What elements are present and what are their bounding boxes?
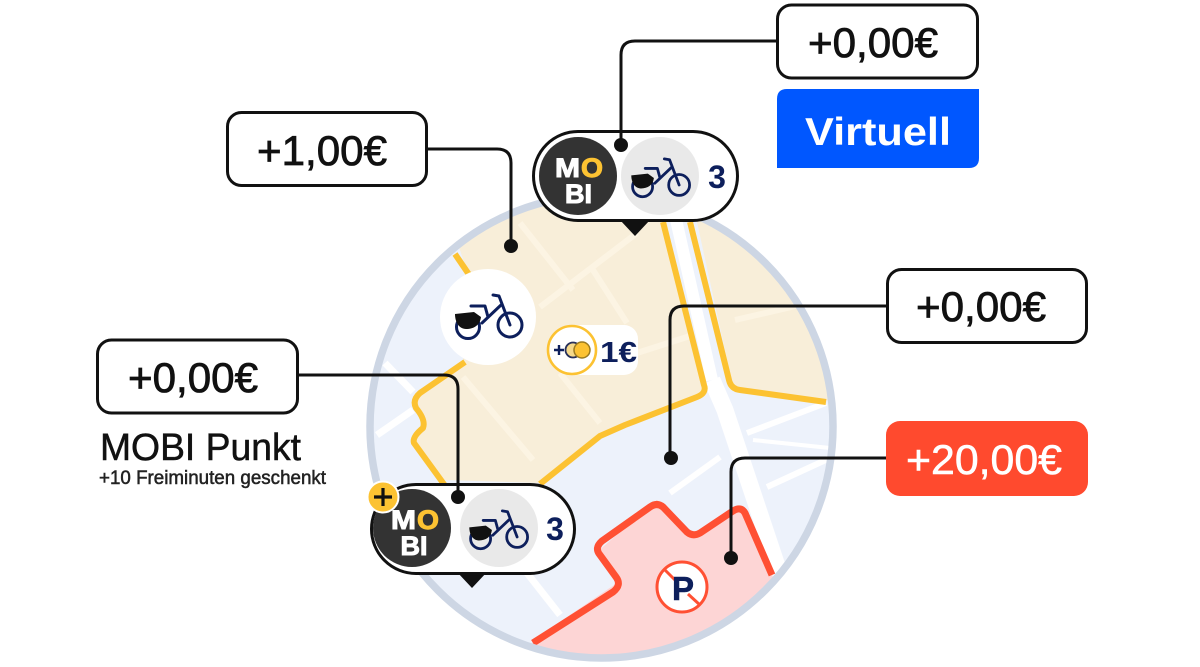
price label: virtual station: +0,00€ [808, 19, 938, 66]
text: MOBI Punkt caption [99, 427, 327, 489]
price label: virtual station [778, 5, 978, 78]
map: white streets [377, 215, 830, 615]
pin: MOBI Punkt station: M [391, 505, 416, 535]
pin: MOBI Punkt station: O [417, 505, 439, 535]
price label: free-floating bike [228, 112, 426, 186]
price label: MOBI Punkt: +0,00€ [128, 354, 258, 401]
icon: plus badge [368, 482, 398, 512]
connector: MOBI Punkt to price [299, 375, 465, 504]
pin: MOBI virtual station [534, 132, 738, 236]
badge: Virtuell [777, 89, 979, 168]
price label: street: +0,00€ [916, 283, 1046, 330]
map: light streets in beige zone [463, 223, 800, 460]
map: yellow boundaries [414, 222, 826, 487]
pin: MOBI virtual station: BI [565, 179, 592, 209]
icon: no parking sign: P [672, 570, 694, 607]
map: no parking zone outline [533, 504, 772, 643]
pin: MOBI virtual station: O [581, 153, 603, 183]
map: no parking zone [532, 500, 773, 654]
price label: MOBI Punkt [98, 340, 298, 413]
price label: free-floating bike: +1,00€ [257, 127, 387, 174]
text: MOBI Punkt caption: +10 Freiminuten geschenkt [99, 468, 327, 489]
text: MOBI Punkt caption: MOBI Punkt [100, 427, 301, 469]
price label: street [888, 270, 1086, 342]
map: beige zone [413, 190, 840, 483]
connector: street to price [664, 306, 887, 465]
panel: circular map [370, 190, 840, 667]
marker: bike station [440, 269, 536, 365]
marker: one euro coin bonus: 1€ [600, 337, 637, 369]
pin: MOBI Punkt station [368, 482, 574, 588]
price label: no parking fee [886, 421, 1088, 496]
pin: MOBI Punkt station: 3 [546, 511, 564, 547]
connector: no parking zone to fee [724, 458, 886, 565]
price label: no parking fee: +20,00€ [906, 436, 1062, 483]
pin: MOBI Punkt station: BI [400, 531, 428, 561]
map: ring [370, 195, 833, 658]
marker: one euro coin bonus [548, 325, 638, 375]
pin: MOBI virtual station: M [555, 153, 580, 183]
connector: virtual station to price [614, 41, 777, 152]
badge: Virtuell: Virtuell [805, 111, 951, 154]
pin: MOBI virtual station: 3 [708, 159, 726, 195]
icon: no parking sign [657, 562, 707, 612]
connector: bike to price [427, 149, 518, 253]
